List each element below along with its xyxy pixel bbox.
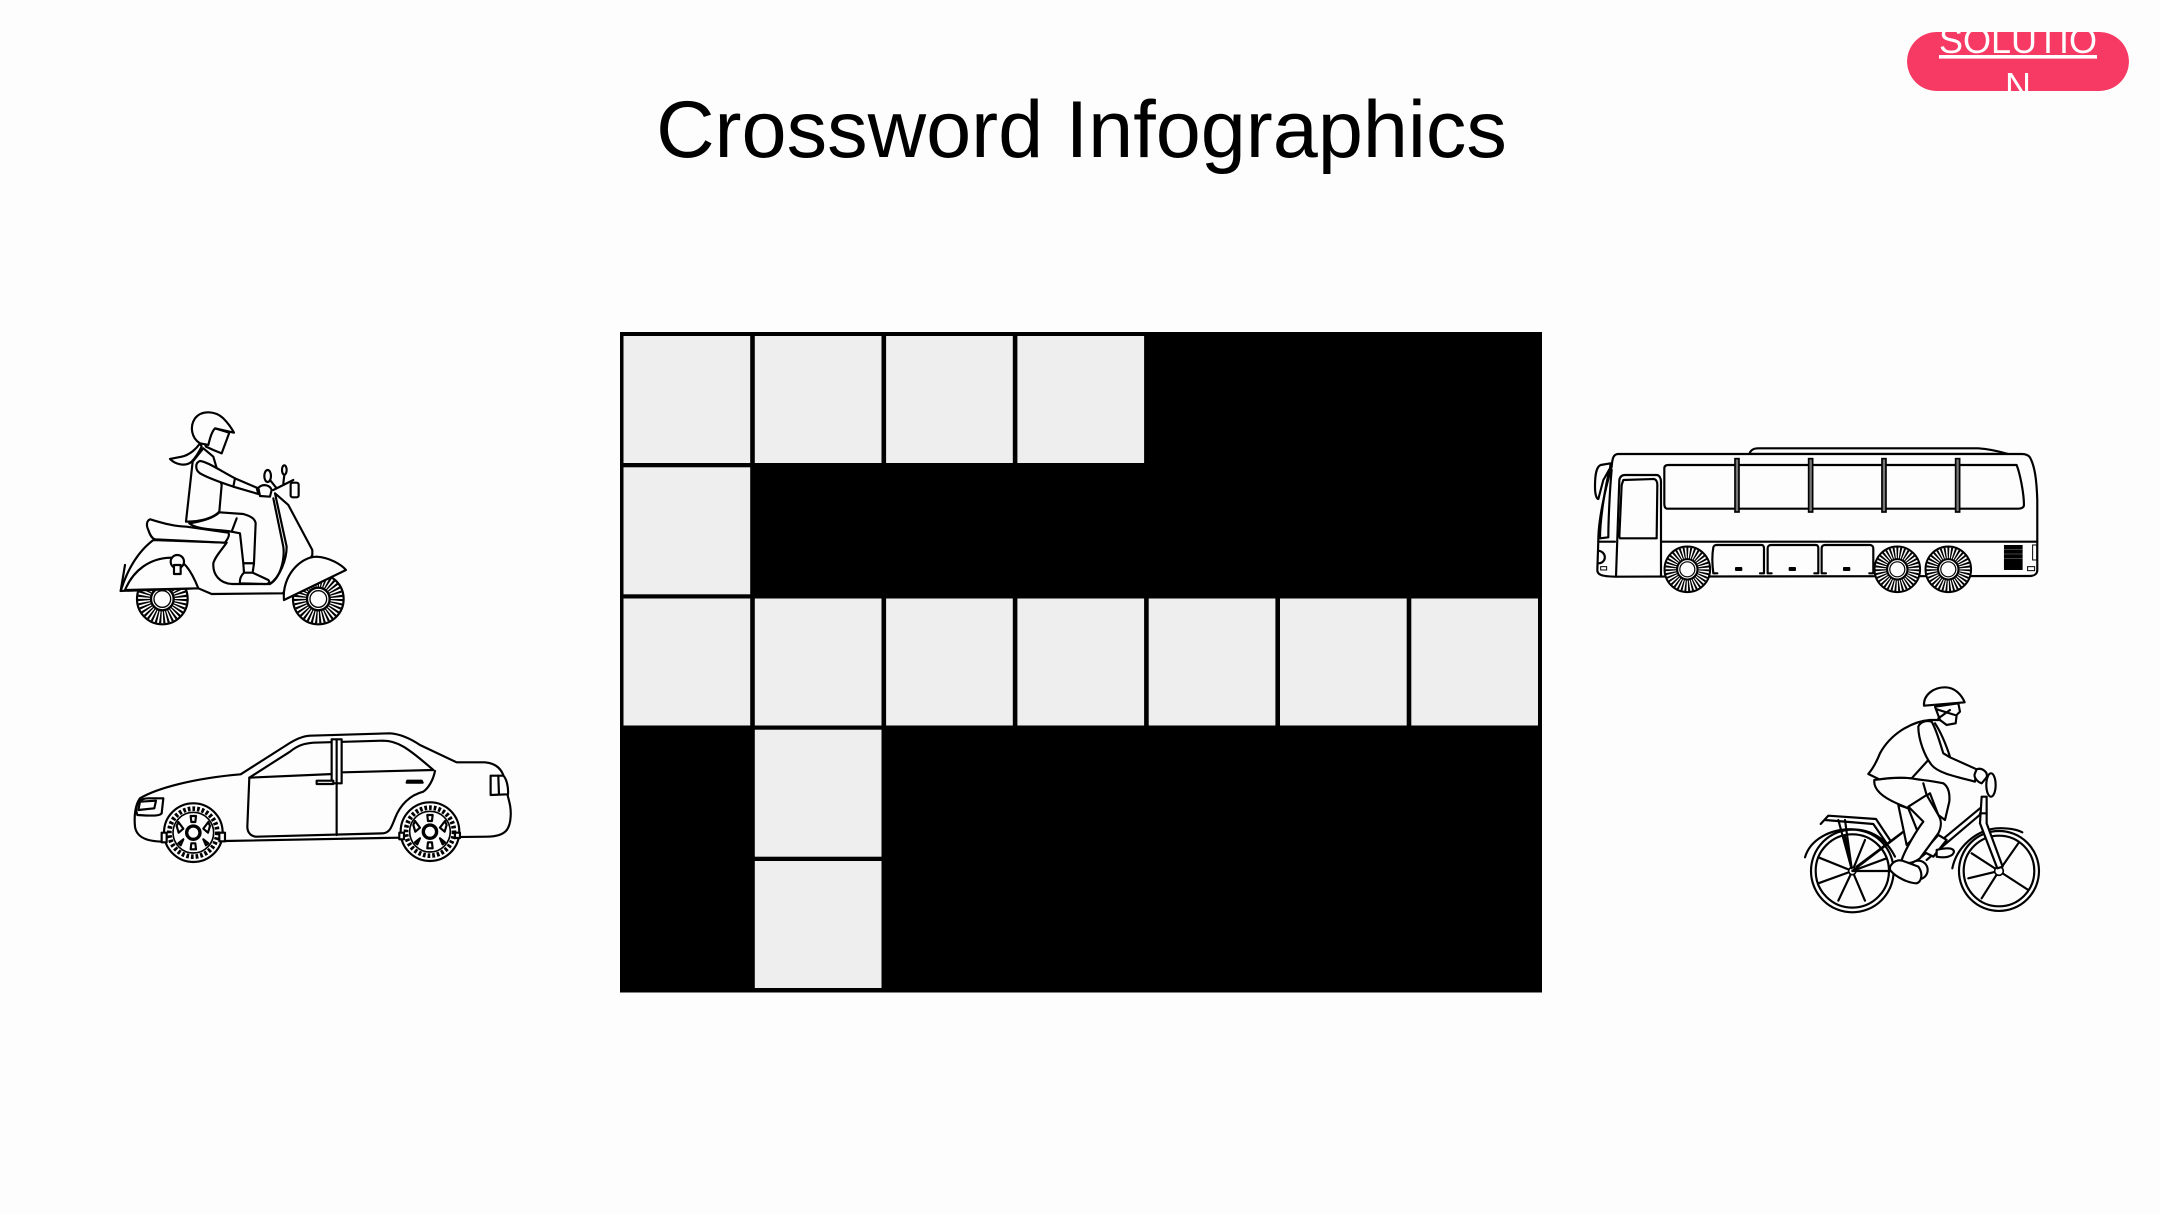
icon: bus [1595,448,2037,592]
icon: cyclist [1805,687,2039,912]
solution button [1907,32,2129,91]
solution button: N [2005,65,2031,106]
down word cells [755,730,882,988]
across word 1 cells [624,336,1144,463]
crossword grid [620,332,1542,992]
solution button: SOLUTIO [1939,20,2097,61]
icon: scooter rider [121,412,346,624]
title: Crossword Infographics [656,85,1507,175]
icon: car [135,733,511,862]
across word 2 cells [624,598,1538,726]
connecting cell [624,467,750,594]
